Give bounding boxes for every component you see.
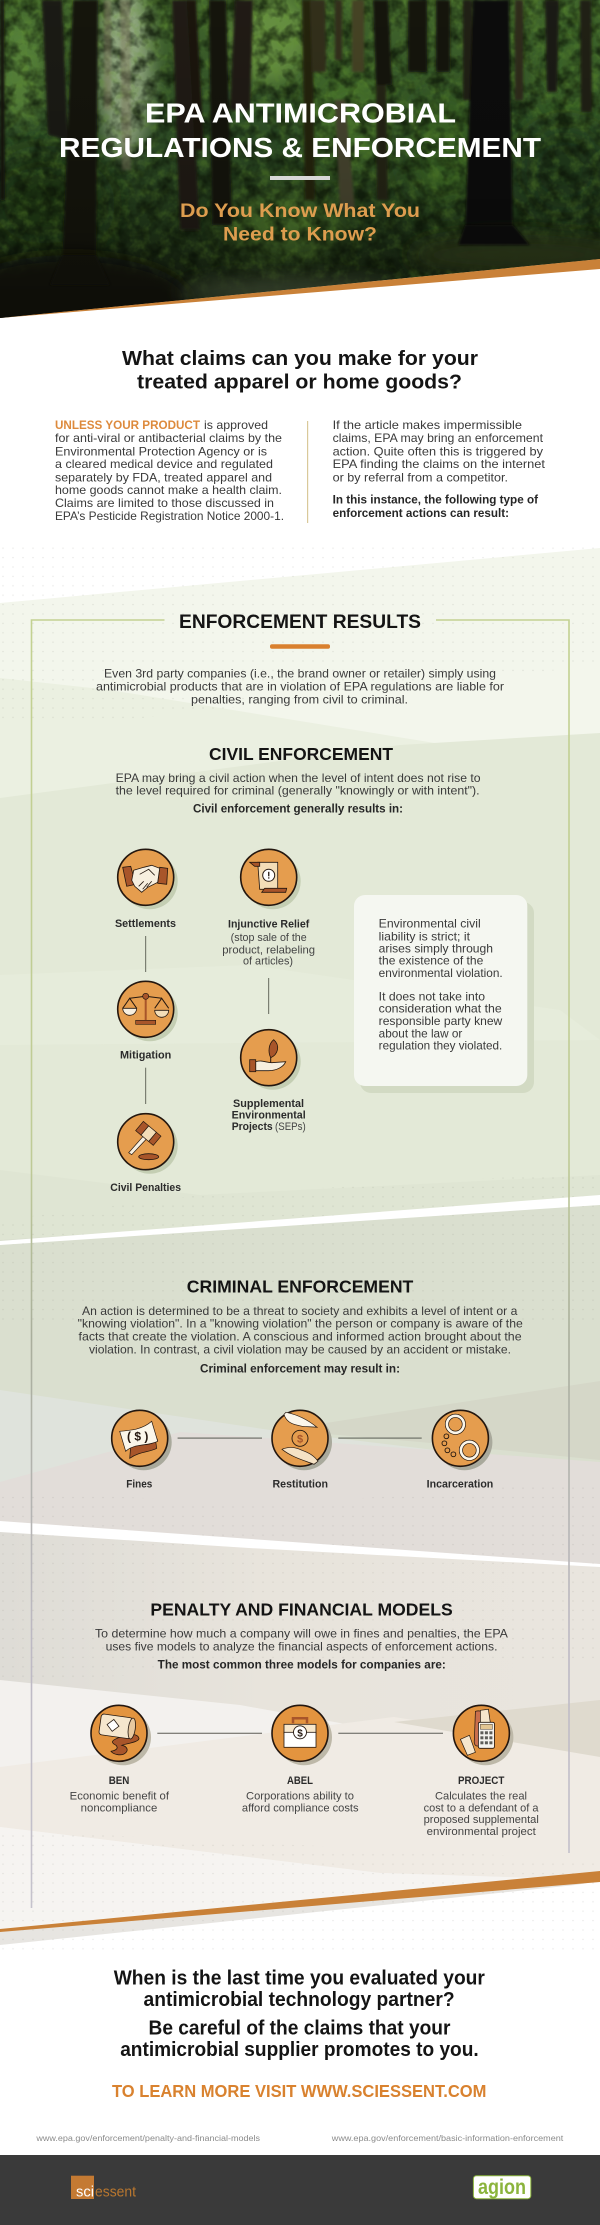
model: PROJECT: proposed supplemental: [424, 1814, 539, 1826]
callout: strict liability: responsible party knew: [379, 1015, 503, 1028]
white diagonal stripes: [0, 1195, 600, 1567]
model: PROJECT: environmental project: [427, 1826, 536, 1838]
text block: civil intro: [116, 772, 481, 816]
icon: ABEL briefcase: $: [297, 1728, 303, 1739]
source links: www.epa.gov/enforcement/basic-information-enforcement: [331, 2133, 564, 2143]
text block: unless your product: [55, 419, 284, 523]
title: [59, 98, 541, 163]
callout: strict liability: the existence of the: [379, 954, 483, 967]
closing question: antimicrobial supplier promotes to you.: [120, 2038, 479, 2061]
heading: enforcement results: ENFORCEMENT RESULTS: [179, 612, 421, 633]
icon: fines money: ( $ ): [127, 1429, 148, 1443]
model: BEN: [70, 1775, 169, 1814]
text block: models intro: The most common three models for companies are:: [158, 1658, 446, 1671]
text block: impermissible claims: If the article makes impermissible: [333, 419, 522, 432]
model: PROJECT: Calculates the real: [435, 1791, 527, 1803]
photo shading: [0, 0, 600, 320]
text block: third party companies: [96, 668, 504, 706]
source links: [35, 2133, 564, 2143]
hero: forest photo: [0, 0, 600, 345]
source links: www.epa.gov/enforcement/penalty-and-financial-models: [35, 2133, 260, 2143]
icon: incarceration handcuffs: [432, 1410, 492, 1470]
icon: settlements handshake: [118, 849, 178, 909]
logo: sciessent: sci: [76, 2184, 94, 2201]
text block: unless your product: a cleared medical device and regulated: [55, 458, 273, 471]
label: injunctive relief: (stop sale of the: [231, 932, 307, 944]
text block: third party companies: antimicrobial products that are in violation of EPA regulations are liable for: [96, 681, 504, 694]
icon: BEN spilled barrel: [91, 1705, 151, 1765]
orange diagonal band: lower: [0, 1871, 600, 1932]
text block: criminal intro: facts that create the violation. A conscious and informed action brought about the: [78, 1331, 522, 1344]
label: settlements: Settlements: [115, 918, 176, 930]
label: fines: Fines: [126, 1478, 152, 1490]
model: ABEL: ABEL: [287, 1775, 313, 1787]
heading: what claims: [122, 347, 478, 394]
text block: unless your product: is approved: [204, 419, 268, 432]
logo: sciessent: [71, 2176, 137, 2201]
text block: criminal intro: "knowing violation". In a "knowing violation" the person or company is aware of the: [78, 1318, 523, 1331]
label: injunctive relief: product, relabeling: [222, 944, 315, 956]
model: PROJECT: cost to a defendant of a: [424, 1802, 539, 1814]
model: BEN: noncompliance: [81, 1802, 157, 1814]
text block: unless your product: Environmental Protection Agency or is: [55, 445, 267, 458]
column divider: [307, 421, 308, 523]
call to action: TO LEARN MORE VISIT WWW.SCIESSENT.COM: [112, 2081, 486, 2101]
heading: criminal enforcement: CRIMINAL ENFORCEMENT: [187, 1277, 414, 1297]
text block: impermissible claims: claims, EPA may bring an enforcement: [333, 432, 544, 445]
icon: restitution: [272, 1410, 332, 1470]
text block: impermissible claims: action. Quite often this is triggered by: [333, 445, 543, 458]
label: supplemental environmental projects: [232, 1098, 306, 1133]
icon: mitigation scales: [118, 981, 178, 1041]
model: ABEL: [242, 1775, 359, 1814]
callout: strict liability: Environmental civil: [379, 918, 481, 931]
icon: civil penalties gavel: [118, 1114, 178, 1174]
logo: agion: agion: [478, 2176, 526, 2199]
mist and foliage light: [0, 0, 600, 255]
text block: models intro: uses five models to analyze the financial aspects of enforcement actions.: [106, 1640, 497, 1653]
text block: impermissible claims: [333, 419, 546, 520]
icon: supplemental environmental projects: [241, 1030, 301, 1090]
model: PROJECT: [424, 1775, 539, 1838]
icon: restitution: $: [297, 1433, 303, 1445]
model: ABEL: afford compliance costs: [242, 1802, 359, 1814]
subtitle: Do You Know What You: [180, 200, 420, 222]
icon: ABEL briefcase: [272, 1705, 332, 1765]
model: PROJECT: PROJECT: [458, 1775, 505, 1787]
logo: sciessent: essent: [95, 2184, 137, 2201]
orange diagonal band: header: [0, 259, 600, 318]
label: injunctive relief: [222, 918, 315, 967]
text block: civil intro: Civil enforcement generally results in:: [193, 803, 403, 816]
callout: strict liability: arises simply through: [379, 942, 493, 955]
heading: what claims: What claims can you make for your: [122, 347, 478, 370]
closing question: antimicrobial technology partner?: [144, 1988, 455, 2011]
callout: strict liability: consideration what the: [379, 1003, 502, 1016]
closing question: [114, 1967, 485, 2061]
title divider: [270, 176, 330, 180]
text block: unless your product: for anti-viral or antibacterial claims by the: [55, 432, 282, 445]
text block: criminal intro: [78, 1305, 523, 1375]
connector: [157, 1733, 262, 1734]
text block: models intro: To determine how much a company will owe in fines and penalties, the EPA: [95, 1628, 508, 1641]
title: REGULATIONS & ENFORCEMENT: [59, 132, 541, 163]
text block: impermissible claims: enforcement actions can result:: [333, 507, 509, 520]
dotted background texture: [0, 545, 600, 1950]
label: supplemental environmental projects: Supplemental: [233, 1098, 304, 1110]
label: incarceration: Incarceration: [427, 1478, 493, 1490]
label: restitution: Restitution: [272, 1478, 328, 1490]
icon: injunctive relief scroll: [241, 849, 301, 909]
callout: strict liability: [354, 895, 534, 1093]
model: BEN: Economic benefit of: [70, 1791, 169, 1803]
text block: third party companies: Even 3rd party companies (i.e., the brand owner or retailer) simply using: [104, 668, 496, 681]
model: BEN: BEN: [109, 1775, 129, 1787]
callout: strict liability: environmental violation.: [379, 967, 503, 980]
connector: [268, 978, 269, 1014]
heading rule: [270, 644, 330, 649]
connector: [145, 1068, 146, 1104]
text block: unless your product: UNLESS YOUR PRODUCT: [55, 419, 200, 432]
text block: unless your product: home goods cannot make a health claim.: [55, 484, 282, 497]
text block: models intro: [95, 1628, 508, 1671]
connector: [338, 1733, 443, 1734]
label: civil penalties: Civil Penalties: [110, 1182, 181, 1194]
closing question: Be careful of the claims that your: [148, 2017, 450, 2040]
text block: impermissible claims: or by referral from a competitor.: [333, 471, 508, 484]
label: injunctive relief: of articles): [243, 955, 293, 967]
subtitle: [180, 200, 420, 246]
leaf texture: [0, 0, 600, 330]
label: mitigation: Mitigation: [120, 1050, 171, 1062]
subtitle: Need to Know?: [223, 224, 377, 246]
label: supplemental environmental projects: Environmental: [232, 1110, 306, 1122]
label: supplemental environmental projects: Projects: [232, 1121, 273, 1133]
heading: civil enforcement: CIVIL ENFORCEMENT: [209, 744, 393, 764]
text block: unless your product: separately by FDA, treated apparel and: [55, 471, 272, 484]
text block: civil intro: the level required for criminal (generally "knowingly or with intent").: [116, 785, 480, 798]
text block: criminal intro: violation. In contrast, a civil violation may be caused by an accident or mistake.: [89, 1343, 511, 1356]
connector: [338, 1438, 422, 1439]
text block: unless your product: Claims are limited to those discussed in: [55, 497, 274, 510]
callout: strict liability: liability is strict; it: [379, 930, 471, 943]
icon: fines money: [112, 1410, 172, 1470]
text block: third party companies: penalties, ranging from civil to criminal.: [191, 693, 408, 706]
label: supplemental environmental projects: (SEPs): [275, 1121, 306, 1133]
callout: strict liability: about the law or: [379, 1027, 462, 1040]
tree trunks: [0, 0, 592, 268]
callout: strict liability: regulation they violated.: [379, 1040, 502, 1053]
closing question: When is the last time you evaluated your: [114, 1967, 485, 1990]
heading: penalty and financial models: PENALTY AND FINANCIAL MODELS: [150, 1600, 453, 1620]
text block: impermissible claims: EPA finding the claims on the internet: [333, 458, 546, 471]
connector: [145, 936, 146, 972]
text block: impermissible claims: In this instance, the following type of: [333, 494, 538, 507]
footer bar: [0, 2155, 600, 2225]
icon: PROJECT calculator: [453, 1705, 513, 1765]
text block: unless your product: EPA’s Pesticide Registration Notice 2000-1.: [55, 510, 284, 523]
heading: what claims: treated apparel or home goods?: [137, 370, 462, 394]
text block: criminal intro: An action is determined to be a threat to society and exhibits a level of intent or a: [82, 1305, 518, 1318]
callout: strict liability: It does not take into: [379, 990, 485, 1003]
connector: [178, 1438, 262, 1439]
panel outline: enforcement results frame: [32, 620, 569, 1908]
label: injunctive relief: Injunctive Relief: [228, 918, 310, 930]
text block: civil intro: EPA may bring a civil action when the level of intent does not rise to: [116, 772, 481, 785]
title: EPA ANTIMICROBIAL: [145, 98, 456, 128]
text block: criminal intro: Criminal enforcement may result in:: [200, 1362, 400, 1375]
dark undergrowth: [0, 226, 600, 318]
model: ABEL: Corporations ability to: [246, 1791, 354, 1803]
